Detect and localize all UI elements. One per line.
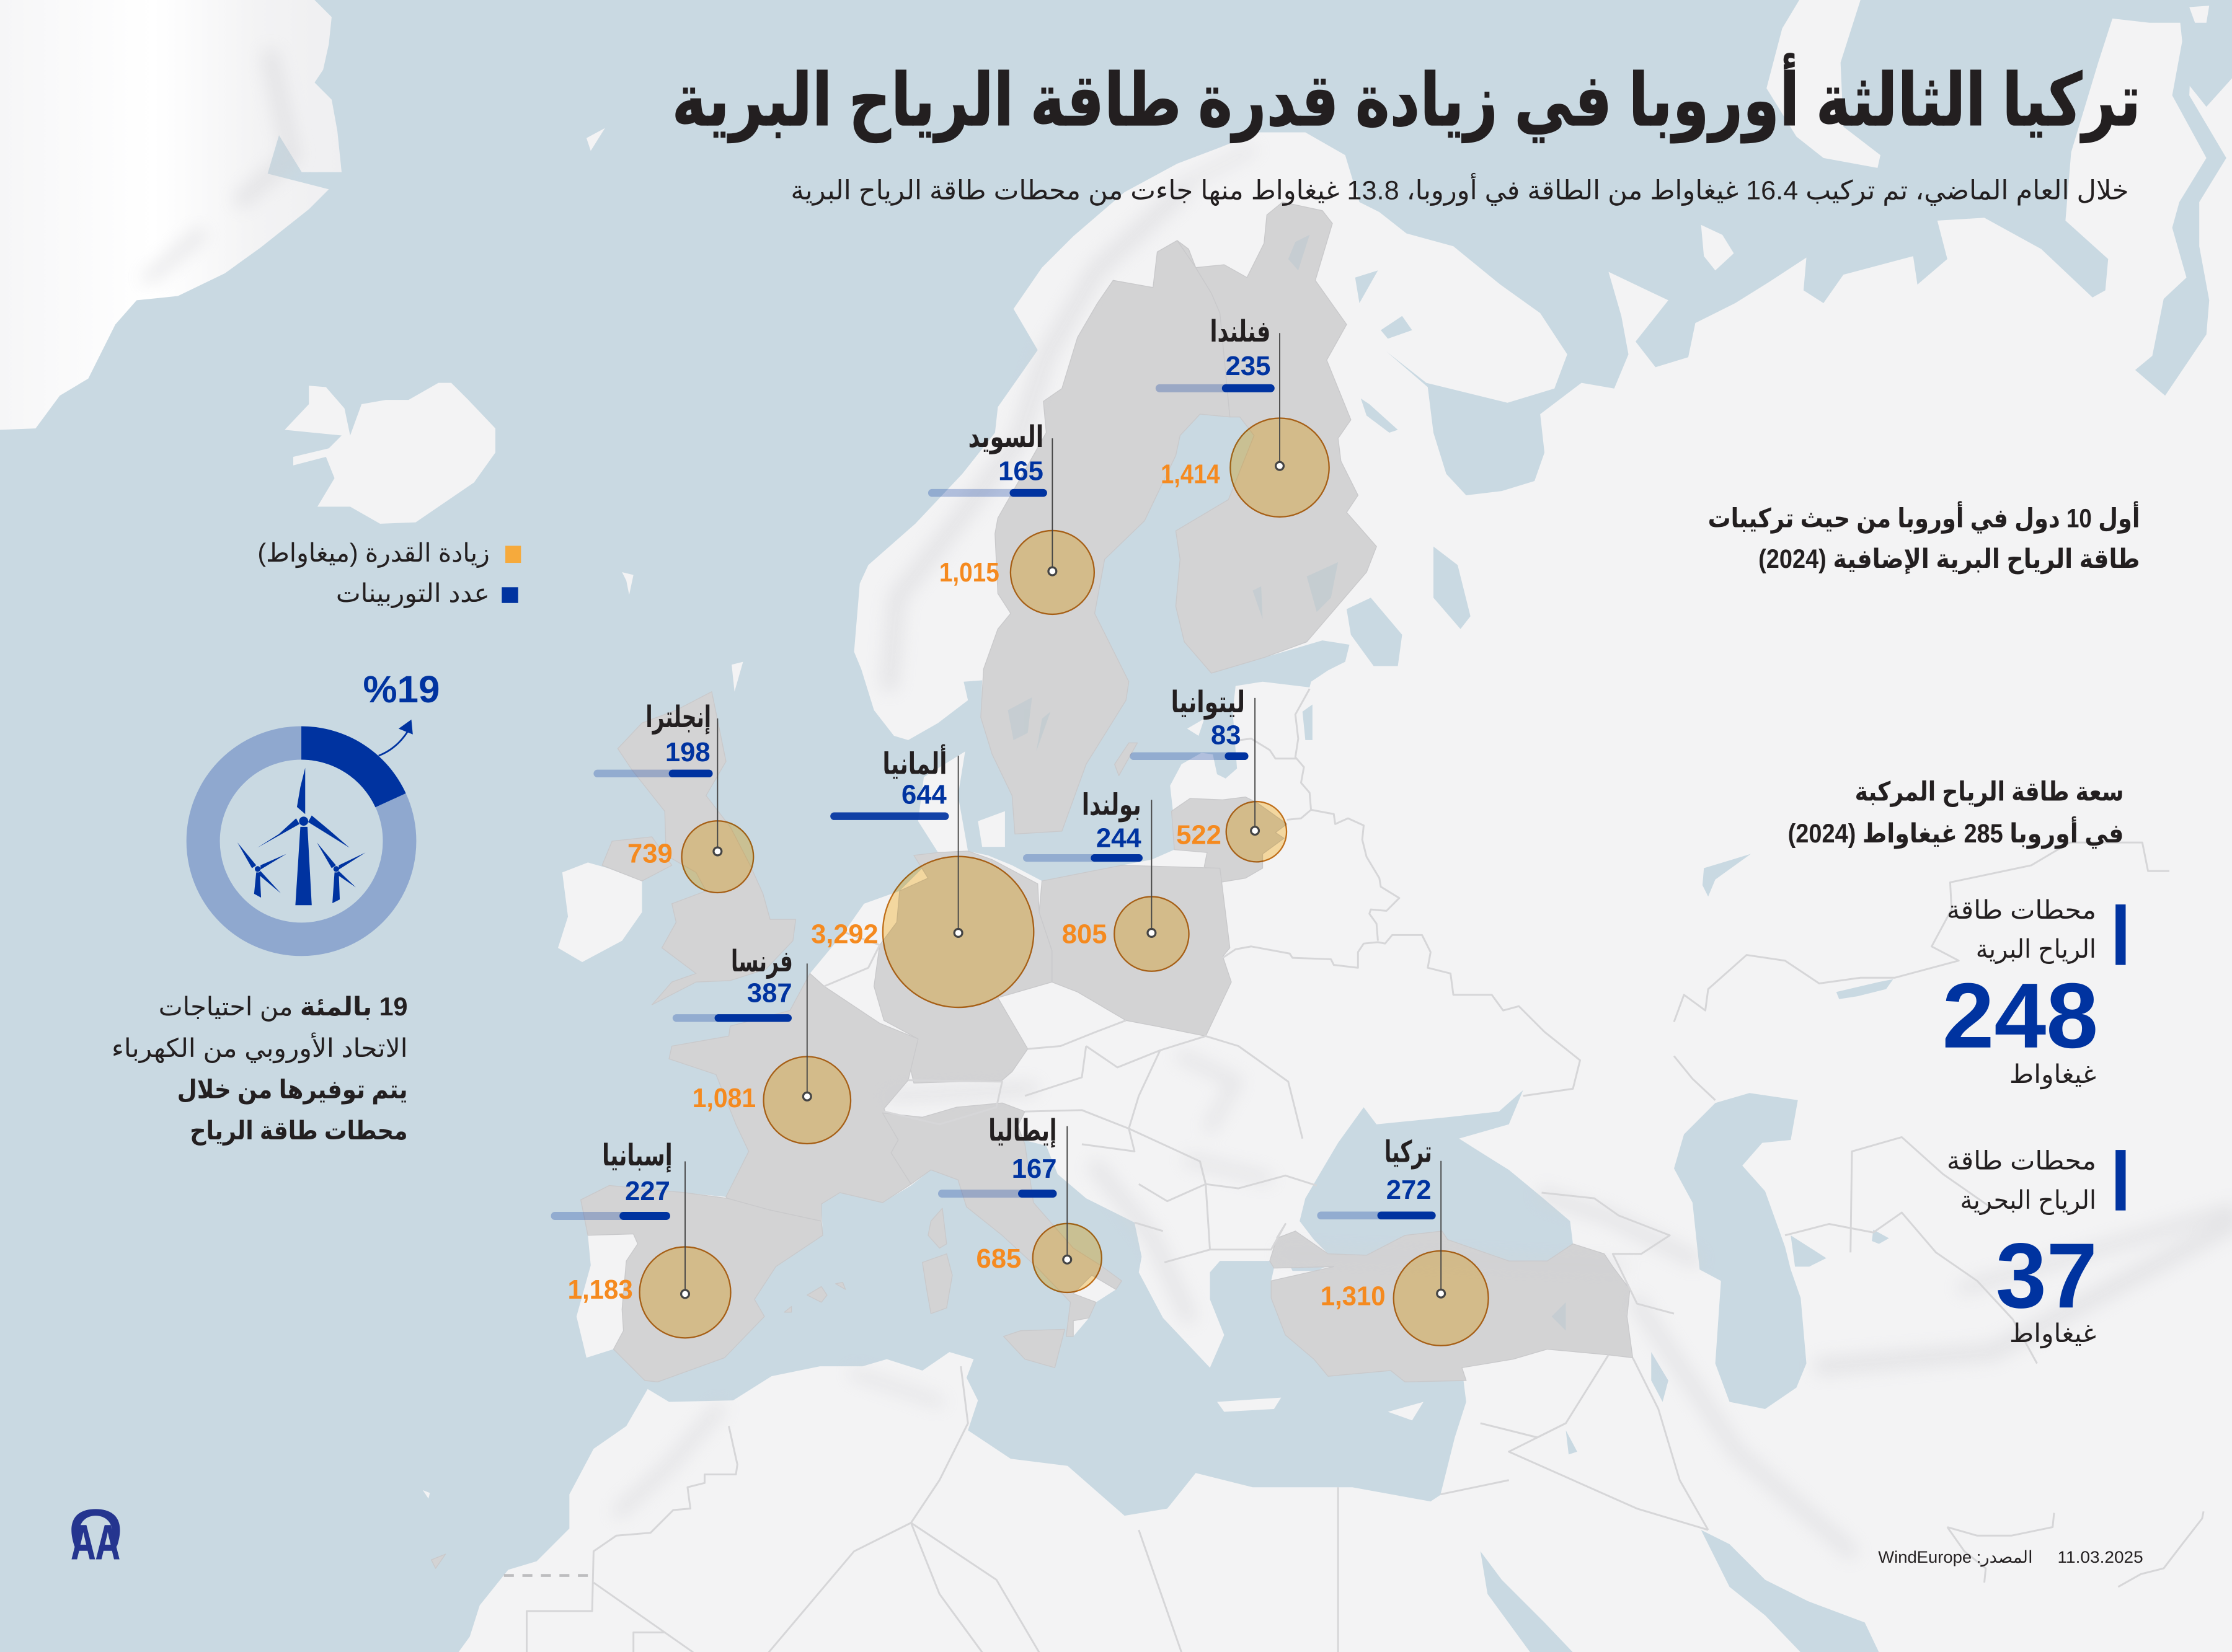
Poland dot xyxy=(1148,929,1156,937)
England name: إنجلترا xyxy=(645,700,711,735)
Spain name: إسبانيا xyxy=(602,1139,673,1173)
logo: Anadolu Agency xyxy=(71,1509,120,1569)
legend xyxy=(258,539,521,608)
source line: المصدر: WindEurope xyxy=(1878,1548,2033,1567)
Italy dot xyxy=(1063,1255,1071,1263)
Lithuania dot xyxy=(1251,827,1259,835)
Greenland xyxy=(0,0,342,430)
Turkey turbine bar xyxy=(1317,1212,1436,1219)
Kolguev island xyxy=(1701,225,1734,270)
France shape xyxy=(669,973,918,1221)
panel heading line 2: في أوروبا 285 غيغاواط (2024) xyxy=(1788,816,2124,849)
Germany dot xyxy=(954,929,962,937)
Germany shape xyxy=(874,851,1052,1083)
Sweden capacity: 1,015 xyxy=(939,558,999,588)
Poland leader line xyxy=(1151,800,1152,932)
Sweden shape xyxy=(981,241,1230,834)
marker: Italy xyxy=(938,1114,1102,1292)
marker: Germany xyxy=(811,744,1034,1007)
onshore bar xyxy=(2115,904,2125,965)
legend label: turbines: عدد التوربينات xyxy=(336,579,490,608)
subtitle: خلال العام الماضي، تم تركيب 16.4 غيغاواط من الطاقة في أوروبا، 13.8 غيغاواط منها جاءت من محطات طاقة الرياح البرية xyxy=(790,172,2129,206)
Turkey name: تركيا xyxy=(1384,1135,1432,1169)
Turkey shape xyxy=(1270,1231,1632,1382)
Finland turbines: 235 xyxy=(1226,351,1270,381)
Sweden turbines: 165 xyxy=(998,456,1043,486)
Sweden turbine bar xyxy=(928,489,1047,497)
panel: installed wind capacity xyxy=(1788,777,2125,1348)
marker: Turkey xyxy=(1317,1135,1489,1346)
Eurasia land xyxy=(577,19,2232,1652)
Finland dot xyxy=(1276,462,1283,470)
marker: Poland xyxy=(1023,788,1189,971)
Turkey turbines: 272 xyxy=(1386,1175,1432,1205)
England turbines: 198 xyxy=(665,738,711,767)
Sweden dot xyxy=(1048,567,1056,575)
logo arch xyxy=(71,1509,120,1547)
Germany leader line xyxy=(958,756,959,932)
Iceland xyxy=(285,383,495,524)
icon: wind turbines xyxy=(237,768,366,905)
France name: فرنسا xyxy=(731,945,793,979)
Turkey dot xyxy=(1437,1289,1445,1297)
marker: Finland xyxy=(1156,315,1329,517)
France dot xyxy=(803,1092,811,1100)
Spain turbines: 227 xyxy=(625,1177,670,1206)
lakes on highlighted countries xyxy=(1008,235,1566,1331)
text block: EU electricity share xyxy=(112,992,408,1146)
Finland bubble xyxy=(1230,418,1329,517)
Italy name: إيطاليا xyxy=(988,1114,1056,1148)
small islands xyxy=(423,6,2209,1499)
line 2: الاتحاد الأوروبي من الكهرباء xyxy=(112,1032,408,1064)
France turbines: 387 xyxy=(747,978,792,1008)
Sardinia shape xyxy=(923,1254,952,1314)
Germany bubble xyxy=(883,857,1034,1007)
Sweden name: السويد xyxy=(968,420,1043,454)
Ireland xyxy=(558,862,642,962)
Sweden bubble xyxy=(1011,531,1094,614)
Germany turbine bar xyxy=(830,813,949,820)
heading: top 10 countries xyxy=(1708,501,2140,575)
Lithuania turbines: 83 xyxy=(1211,721,1241,751)
Spain turbine bar xyxy=(551,1212,670,1220)
England dot xyxy=(714,847,722,855)
offshore value: 37 xyxy=(1996,1224,2097,1327)
legend swatch: capacity xyxy=(505,546,521,563)
United Kingdom shape xyxy=(618,692,795,1005)
Finland capacity: 1,414 xyxy=(1161,460,1220,490)
England capacity: 739 xyxy=(627,839,673,868)
Poland shape xyxy=(1039,865,1231,1036)
onshore unit: غيغاواط xyxy=(2009,1060,2096,1089)
Corsica shape xyxy=(928,1208,947,1248)
France bubble xyxy=(764,1056,851,1144)
Spain dot xyxy=(681,1290,689,1298)
Germany turbines: 644 xyxy=(901,780,947,810)
Turkey bubble xyxy=(1394,1251,1489,1346)
England bubble xyxy=(682,821,753,893)
seas and lakes xyxy=(1288,0,2226,1652)
country borders xyxy=(526,689,2203,1652)
Germany name: ألمانيا xyxy=(882,744,947,780)
heading line 1: أول 10 دول في أوروبا من حيث تركيبات xyxy=(1708,501,2140,534)
Spain leader line xyxy=(684,1161,686,1294)
disputed border dashes xyxy=(504,1575,592,1576)
Turkey leader line xyxy=(1440,1161,1442,1292)
date: 11.03.2025 xyxy=(2058,1548,2143,1566)
England turbine bar xyxy=(593,770,713,777)
France turbine bar xyxy=(673,1014,792,1022)
Poland capacity: 805 xyxy=(1062,919,1107,949)
Gotland xyxy=(1115,743,1137,775)
Lithuania name: ليتوانيا xyxy=(1171,686,1245,720)
Finland turbine bar xyxy=(1156,384,1275,392)
Poland turbines: 244 xyxy=(1096,824,1141,854)
Lithuania capacity: 522 xyxy=(1176,820,1221,850)
Italy turbines: 167 xyxy=(1012,1154,1056,1184)
donut 19 percent segment xyxy=(301,727,406,807)
Africa land xyxy=(458,1352,1580,1652)
Italy turbine bar xyxy=(938,1190,1056,1198)
marker: Spain xyxy=(551,1139,730,1338)
Finland shape xyxy=(1176,202,1376,673)
panel heading line 1: سعة طاقة الرياح المركبة xyxy=(1855,777,2124,807)
offshore unit: غيغاواط xyxy=(2009,1319,2096,1348)
line 4: محطات طاقة الرياح xyxy=(190,1116,408,1146)
percentage value: %19 xyxy=(363,668,440,710)
arrow xyxy=(379,720,413,756)
Northern Ireland shape xyxy=(602,837,672,881)
marker: Sweden xyxy=(928,420,1094,614)
onshore label line 1: محطات طاقة xyxy=(1947,896,2096,924)
Sicily shape xyxy=(1004,1329,1065,1367)
Lithuania turbine bar xyxy=(1130,753,1249,760)
Italy leader line xyxy=(1066,1126,1068,1260)
Menorca xyxy=(836,1283,846,1289)
line 3: يتم توفيرها من خلال xyxy=(177,1076,408,1105)
Italy capacity: 685 xyxy=(976,1244,1021,1274)
Spain capacity: 1,183 xyxy=(568,1275,633,1305)
line 1: 19 بالمئة من احتياجات xyxy=(159,992,408,1022)
Turkey capacity: 1,310 xyxy=(1321,1281,1386,1311)
offshore label line 1: محطات طاقة xyxy=(1947,1147,2096,1175)
highlighted countries xyxy=(432,202,1632,1568)
panel: EU electricity share donut xyxy=(203,668,440,939)
Lithuania bubble xyxy=(1226,802,1286,862)
Balearic islands xyxy=(807,1287,827,1302)
Spain bubble xyxy=(640,1247,730,1338)
Sweden leader line xyxy=(1052,438,1053,571)
Italy shape xyxy=(882,1103,1122,1336)
Lithuania shape xyxy=(1172,797,1287,882)
legend swatch: turbines xyxy=(502,587,518,603)
Ibiza xyxy=(784,1307,792,1312)
marker: England xyxy=(593,700,753,893)
Finland name: فنلندا xyxy=(1210,315,1270,348)
Poland name: بولندا xyxy=(1082,788,1141,823)
marker: France xyxy=(673,945,851,1144)
marker: Lithuania xyxy=(1130,686,1286,862)
onshore value: 248 xyxy=(1942,964,2098,1067)
donut remainder ring xyxy=(203,743,399,939)
England leader line xyxy=(717,718,718,851)
Germany capacity: 3,292 xyxy=(811,919,879,949)
heading line 2: طاقة الرياح البرية الإضافية (2024) xyxy=(1758,544,2140,575)
offshore label line 2: الرياح البحرية xyxy=(1960,1186,2096,1215)
Novaya Zemlya xyxy=(1766,0,1880,168)
Italy bubble xyxy=(1033,1224,1102,1292)
Lithuania leader line xyxy=(1254,698,1256,830)
France capacity: 1,081 xyxy=(693,1084,756,1113)
offshore bar xyxy=(2115,1150,2125,1211)
France leader line xyxy=(807,963,808,1096)
logo letters: AA xyxy=(71,1514,120,1569)
Spain shape xyxy=(581,1185,823,1382)
Poland bubble xyxy=(1114,896,1189,971)
Poland turbine bar xyxy=(1023,854,1143,862)
Finland leader line xyxy=(1279,333,1280,466)
Denmark islands xyxy=(978,811,1005,847)
legend label: capacity: زيادة القدرة (ميغاواط) xyxy=(258,539,490,568)
Canary islands xyxy=(432,1554,446,1568)
onshore label line 2: الرياح البرية xyxy=(1976,935,2096,964)
